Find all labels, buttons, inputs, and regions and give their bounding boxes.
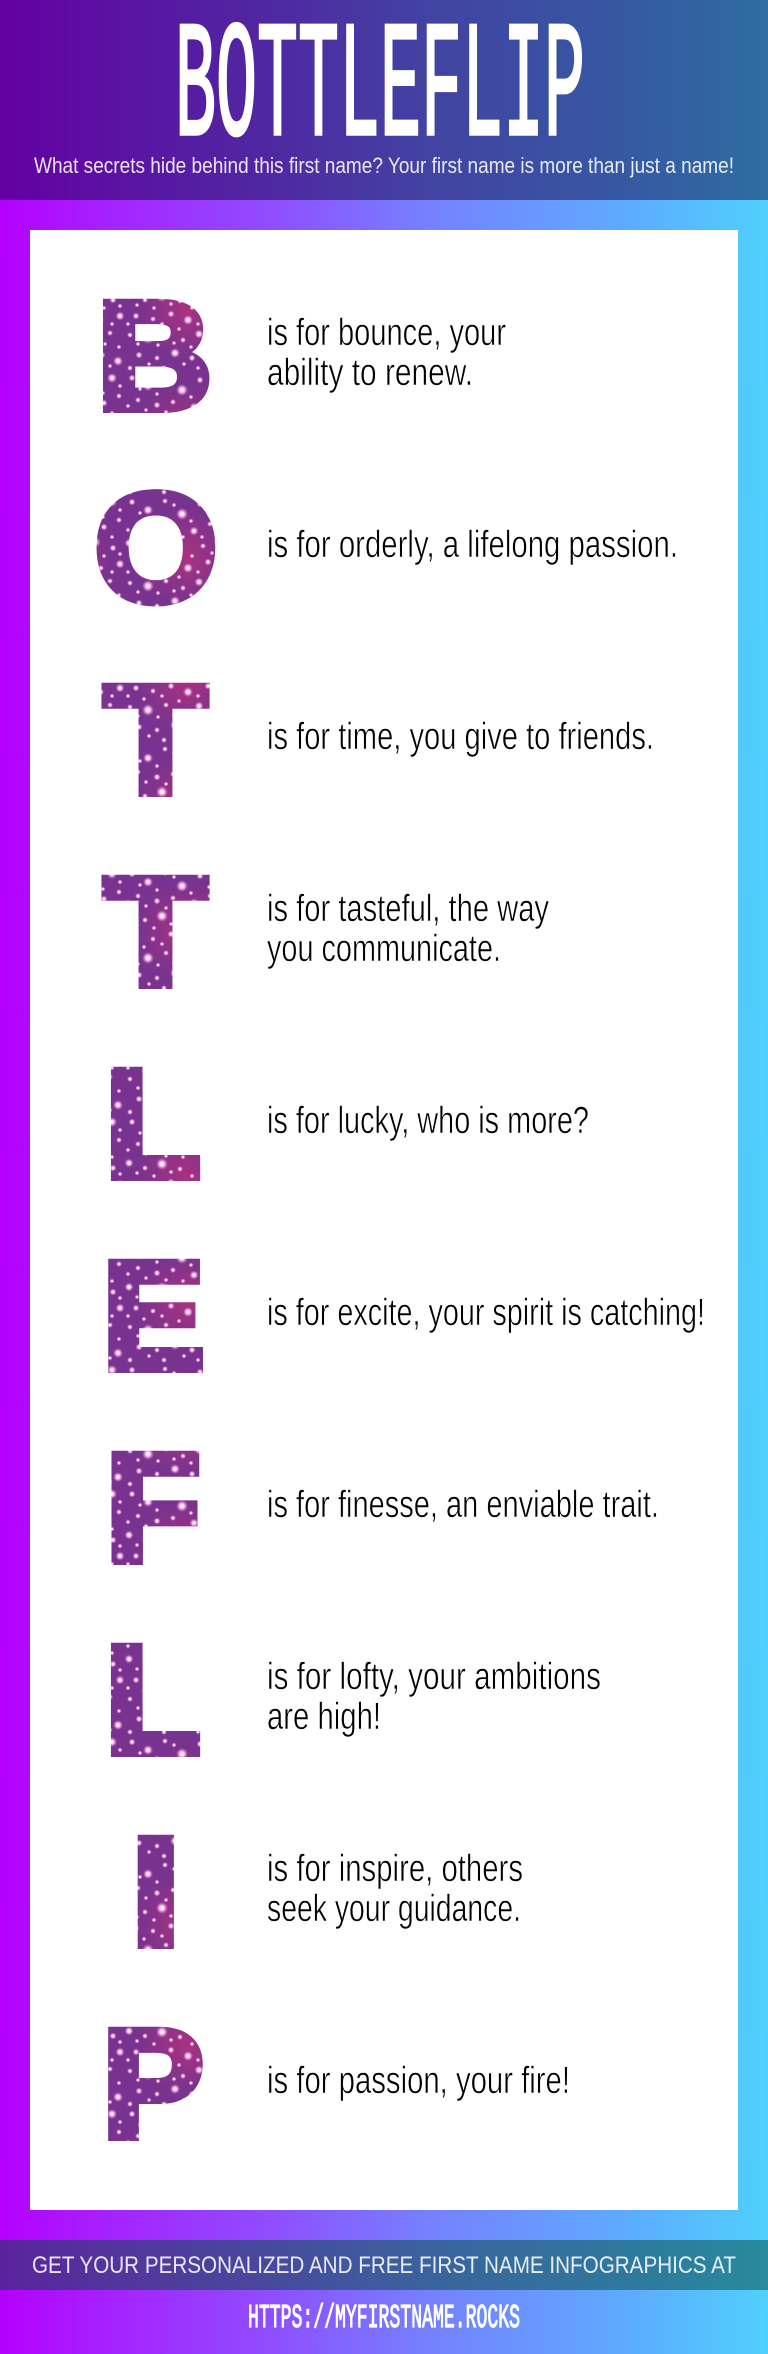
text: P line: is for passion, your fire! <box>267 2060 570 2102</box>
icon: galaxy letter T: T <box>104 654 206 826</box>
icon: galaxy letter E: E <box>102 1230 204 1402</box>
row: P <box>102 1998 570 2170</box>
row: L <box>105 1038 589 1210</box>
row: L second <box>105 1614 601 1786</box>
row: E <box>102 1230 705 1402</box>
icon: galaxy letter I: I <box>131 1806 181 1978</box>
text: T second line: is for tasteful, the way <box>267 888 549 930</box>
footer band <box>0 2240 768 2290</box>
text: L second line: is for lofty, your ambitions <box>267 1656 601 1698</box>
row: I <box>131 1806 523 1978</box>
header band <box>0 0 768 200</box>
row: O <box>95 462 678 634</box>
text: L line: is for lucky, who is more? <box>267 1100 589 1142</box>
text: B line <box>267 312 506 394</box>
text: I line: is for inspire, others <box>267 1848 523 1890</box>
icon: galaxy letter L: L <box>105 1038 200 1210</box>
footer url: HTTPS://MYFIRSTNAME.ROCKS <box>248 2300 520 2337</box>
icon: galaxy letter T: T <box>104 846 206 1018</box>
text: L second line: are high! <box>267 1696 381 1738</box>
icon: galaxy letter L: L <box>105 1614 200 1786</box>
icon: galaxy letter P: P <box>102 1998 204 2170</box>
text: T second line: you communicate. <box>267 928 501 970</box>
white panel with acrostic rows <box>30 230 738 2210</box>
icon: galaxy letter B: B <box>97 270 212 442</box>
text: F line: is for finesse, an enviable trait. <box>267 1484 659 1526</box>
row: B <box>97 270 506 442</box>
row: T <box>104 654 654 826</box>
text: T line: is for time, you give to friends. <box>267 716 654 758</box>
row: F <box>106 1422 659 1594</box>
icon: galaxy letter F: F <box>106 1422 200 1594</box>
text: I line: seek your guidance. <box>267 1888 521 1930</box>
row: T second <box>104 846 549 1018</box>
text: I line <box>267 1848 523 1930</box>
icon: galaxy letter O: O <box>95 462 217 634</box>
text: L second line <box>267 1656 601 1738</box>
text: B line: is for bounce, your <box>267 312 506 354</box>
text: B line: ability to renew. <box>267 352 473 394</box>
text: T second line <box>267 888 549 970</box>
